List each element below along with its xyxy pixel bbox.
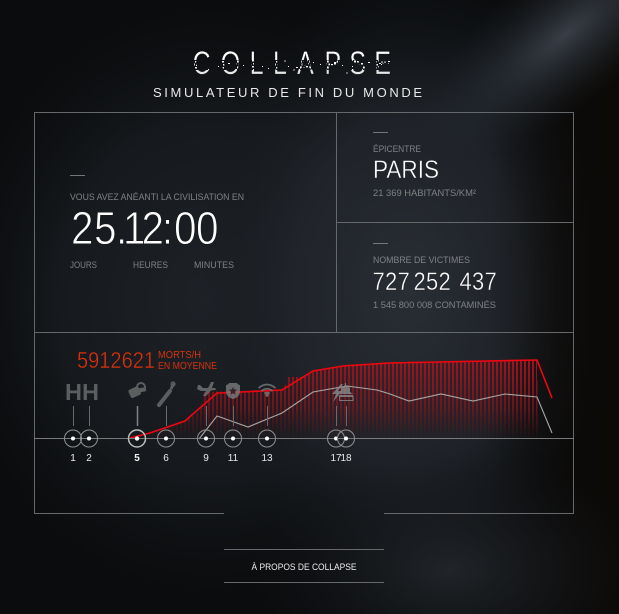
icon: padlock (128, 383, 146, 399)
event 1 (64, 406, 82, 464)
event 13: 13 (261, 453, 273, 464)
event 11 (224, 406, 242, 464)
epicentre label: ÉPICENTRE (373, 144, 421, 155)
panel: epicentre (373, 132, 476, 199)
red line (130, 360, 552, 438)
event 17: 17 (330, 453, 342, 464)
panel: victims (373, 243, 497, 311)
event 5: 5 (134, 453, 140, 464)
time units: HEURES (133, 260, 168, 271)
title: COLLAPSE (193, 46, 391, 82)
time caption: VOUS AVEZ ANÉANTI LA CIVILISATION EN (70, 192, 244, 203)
baseline (34, 438, 574, 439)
contaminated count: 1 545 800 008 CONTAMINÉS (373, 300, 496, 311)
panel: civilisation time (70, 175, 244, 271)
event 1: 1 (70, 453, 76, 464)
white line (199, 386, 552, 439)
time units: MINUTES (194, 260, 234, 271)
icon: HH: HH (65, 379, 99, 405)
event 6 (158, 406, 174, 464)
victims label: NOMBRE DE VICTIMES (373, 255, 470, 266)
event 11: 11 (228, 453, 239, 464)
time units: JOURS (70, 260, 97, 271)
event 13 (258, 406, 276, 464)
frame and dividers (34, 112, 574, 514)
deaths per hour (77, 347, 217, 373)
event 9 (198, 406, 214, 464)
event 2: 2 (86, 453, 92, 464)
event 2 (80, 406, 98, 464)
icon: wrench (159, 382, 175, 405)
chart: death rate (130, 360, 552, 440)
victims number: 727 252 437 (373, 268, 497, 295)
title (194, 51, 390, 74)
about button: À PROPOS DE COLLAPSE (252, 562, 356, 572)
icon: police badge (226, 383, 240, 399)
event 18: 18 (340, 453, 352, 464)
timeline events (64, 406, 354, 464)
icon: lightning (332, 384, 343, 402)
time value: 25.12:00 (71, 204, 218, 255)
epicentre density: 21 369 HABITANTS/KM² (373, 188, 476, 199)
deaths per hour: MORTS/H (158, 350, 201, 361)
event 17 (328, 406, 344, 464)
bars (148, 360, 538, 440)
icon: plane (197, 382, 216, 396)
event 18 (338, 406, 354, 464)
event 6: 6 (163, 453, 169, 464)
time units (70, 260, 234, 271)
event 5 (128, 406, 146, 464)
icon: wifi (258, 384, 276, 396)
deaths per hour: 5912621 (77, 347, 155, 373)
deaths per hour: EN MOYENNE (158, 361, 217, 372)
icon: capitol building (339, 383, 353, 400)
subtitle: SIMULATEUR DE FIN DU MONDE (153, 85, 422, 100)
event 9: 9 (203, 453, 209, 464)
epicentre city: PARIS (373, 156, 439, 184)
